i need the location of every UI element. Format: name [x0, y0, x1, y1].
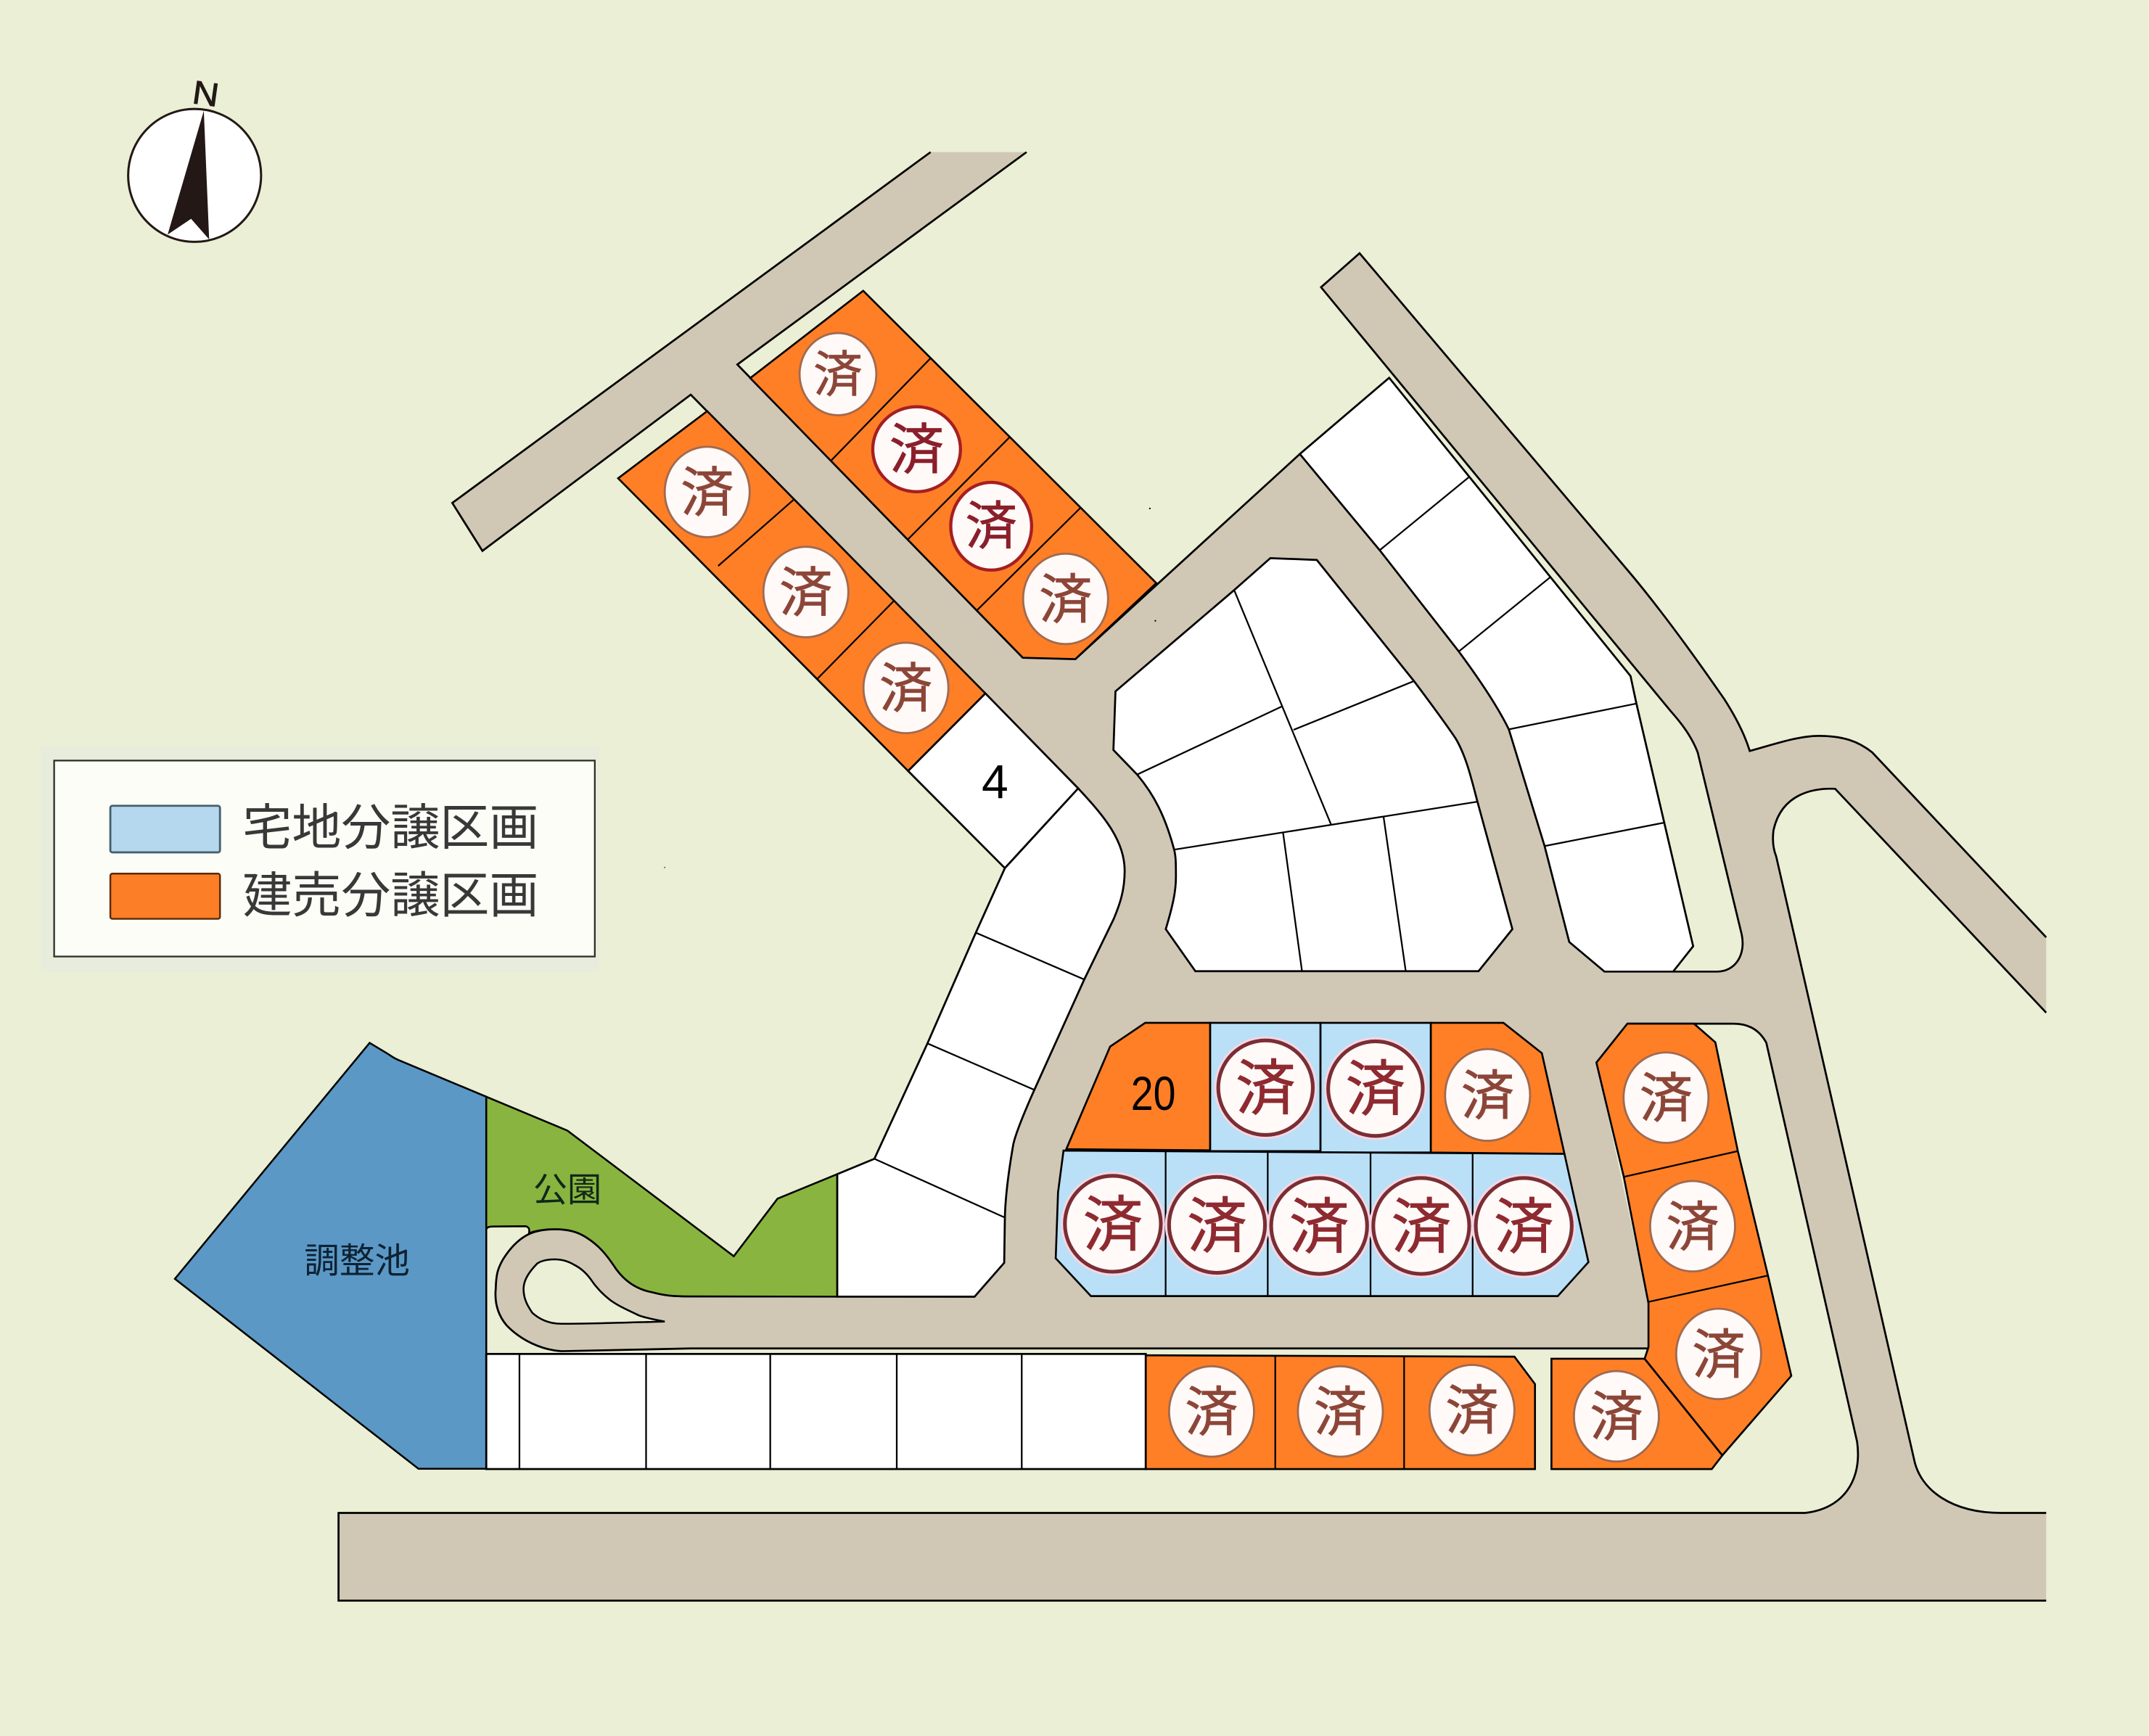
sold stamp: 済 — [1391, 1193, 1451, 1261]
sold stamp: 済 — [965, 498, 1017, 556]
pond label: 調整池 — [304, 1241, 410, 1280]
sold stamp — [1298, 1366, 1383, 1457]
lot number 20: 20 — [1131, 1067, 1176, 1120]
sold stamp: 済 — [1692, 1325, 1746, 1385]
sold stamp — [1429, 1365, 1514, 1455]
sold stamp: 済 — [1039, 569, 1093, 630]
sold stamp: 済 — [1639, 1069, 1693, 1129]
legend swatch: built-for-sale lots — [110, 873, 220, 919]
lot 4 — [908, 694, 1078, 868]
sold stamp: 済 — [1185, 1382, 1238, 1442]
sold stamp — [873, 407, 961, 492]
central block: lower row — [1056, 1151, 1588, 1296]
sold stamp: 済 — [1345, 1056, 1405, 1123]
legend swatch: residential lots — [110, 806, 220, 852]
sold stamp: 済 — [1236, 1055, 1296, 1122]
sold stamp — [1369, 1174, 1474, 1278]
sold stamp: 済 — [1590, 1387, 1643, 1447]
icon: north compass: N — [190, 74, 221, 114]
sold stamp — [1471, 1174, 1576, 1278]
sold stamp — [1676, 1309, 1761, 1399]
white lots: north-east block — [1300, 378, 1693, 971]
bottom row: orange lots — [1146, 1355, 1535, 1469]
sold stamp: 済 — [813, 347, 863, 403]
cul-de-sac island — [524, 1259, 665, 1324]
sold stamp: 済 — [681, 463, 734, 523]
sold stamp — [863, 643, 948, 733]
sold stamp: 済 — [889, 420, 944, 481]
sold stamp: 済 — [1494, 1193, 1554, 1261]
sold stamp — [1169, 1366, 1254, 1457]
lot number 4: 4 — [982, 755, 1008, 809]
sold stamp: 済 — [1187, 1193, 1247, 1260]
orange lots: south-west row — [618, 411, 985, 771]
sold stamp — [1061, 1172, 1165, 1276]
sold stamp — [1267, 1174, 1371, 1278]
legend label: built-for-sale lots: 建売分譲区画 — [242, 868, 538, 923]
sold stamp — [1574, 1371, 1659, 1462]
park — [486, 1097, 837, 1296]
bottom row: white lots — [486, 1354, 1146, 1469]
orange lots: north-east row — [750, 291, 1156, 659]
sold stamp — [763, 547, 848, 637]
sold stamp: 済 — [1289, 1193, 1349, 1261]
orange lots: south-east block — [1551, 1024, 1791, 1469]
sold stamp — [1165, 1173, 1269, 1277]
sold stamp: 済 — [1082, 1191, 1143, 1259]
sold stamp: 済 — [879, 659, 932, 719]
white lots: western curve — [837, 789, 1125, 1296]
sold stamp: 済 — [1461, 1066, 1514, 1126]
sold stamp: 済 — [779, 562, 833, 622]
legend label: residential lots: 宅地分譲区画 — [242, 801, 538, 856]
sold stamp — [1445, 1049, 1530, 1141]
sold stamp — [1650, 1181, 1735, 1272]
sold stamp — [950, 482, 1032, 570]
central block: upper row — [1067, 1023, 1564, 1154]
sold stamp: 済 — [1445, 1381, 1499, 1441]
retention pond — [175, 1043, 486, 1469]
road network — [339, 152, 2046, 1600]
white lots: middle block — [1114, 558, 1513, 971]
lot 20 — [1067, 1023, 1210, 1151]
sold stamp — [1624, 1053, 1709, 1143]
sold stamp — [665, 447, 749, 537]
sold stamp — [1214, 1036, 1317, 1139]
legend — [41, 747, 599, 971]
park label: 公園 — [533, 1172, 601, 1210]
sold stamp — [1324, 1037, 1427, 1140]
sold stamp: 済 — [1666, 1197, 1719, 1257]
icon: north compass — [128, 74, 261, 242]
sold stamp — [1023, 554, 1108, 644]
sold stamp: 済 — [1314, 1382, 1367, 1442]
sold stamp — [800, 333, 876, 415]
